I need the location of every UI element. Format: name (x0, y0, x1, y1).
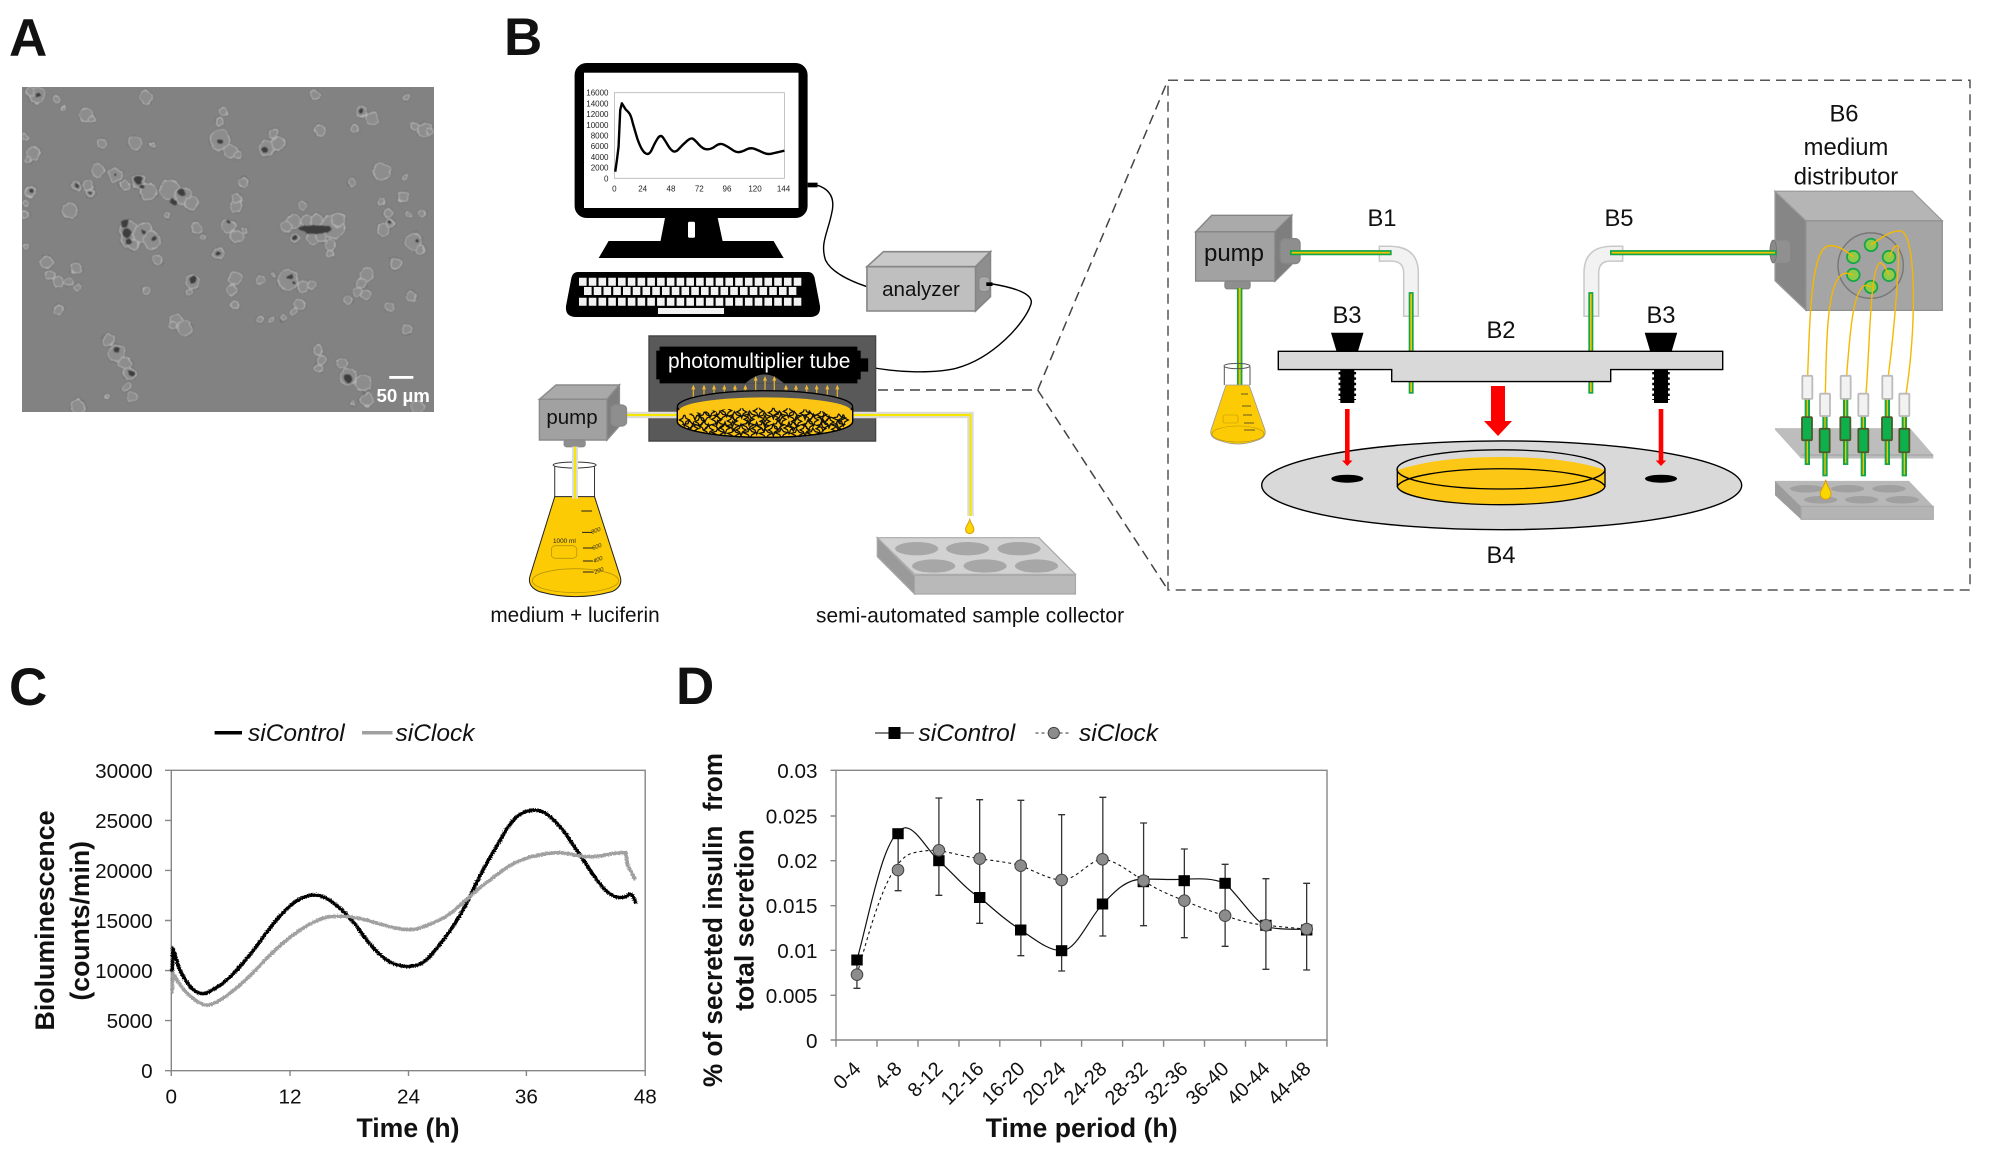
chart C: bioluminescence (30, 720, 657, 1143)
B3 screw right (1645, 333, 1677, 403)
chart D axes: 20-24 (1019, 1058, 1071, 1110)
screen chart: 16000 (586, 89, 609, 98)
labels B1 to B5 (1332, 205, 1676, 569)
chart D axis titles: % of secreted insulin from (698, 753, 728, 1087)
chart D legend: siClock (1079, 720, 1160, 747)
medium + luciferin label: medium + luciferin (490, 604, 660, 627)
screen chart: 12000 (586, 110, 609, 119)
chart D axes: 24-28 (1060, 1058, 1112, 1110)
panel label B: B (504, 8, 542, 67)
chart D axes: 36-40 (1182, 1058, 1234, 1110)
panel label A: A (9, 9, 47, 68)
screen chart: 96 (723, 184, 732, 194)
chart D axes: 4-8 (871, 1058, 907, 1094)
chart D axes: 44-48 (1264, 1058, 1316, 1110)
pump (main setup) (539, 385, 626, 447)
B6 label: distributor (1794, 164, 1898, 191)
B1 elbow connector (1290, 246, 1418, 394)
chart D axes: 0.025 (766, 806, 818, 828)
B3 holes (1331, 475, 1677, 483)
chart C axes: 0 (141, 1060, 153, 1083)
chart C axis titles: Time (h) (357, 1113, 459, 1143)
screen chart (586, 89, 791, 194)
chart D legend: siControl (918, 720, 1016, 747)
photomultiplier tube (656, 347, 868, 383)
photomultiplier tube: photomultiplier tube (668, 350, 850, 373)
chart D siClock line (857, 850, 1307, 975)
medium flask: 600 (592, 543, 604, 552)
pump (main setup): pump (546, 406, 598, 429)
chart C legend: siControl (248, 720, 345, 747)
analyzer box (867, 252, 993, 311)
medium flask: 1000 ml (553, 538, 576, 545)
medium flask (529, 447, 621, 597)
keyboard (566, 272, 820, 317)
chart D axes (766, 760, 1327, 1110)
panel label D: D (676, 657, 714, 716)
labels B1 to B5: B3 (1646, 302, 1676, 329)
B5 elbow connector (1584, 246, 1623, 394)
inset flask (1211, 363, 1265, 444)
screen chart: 14000 (586, 99, 609, 108)
screen chart: 6000 (591, 142, 609, 151)
chart C axes: 20000 (95, 860, 153, 883)
cell monolayer (678, 408, 850, 437)
inset pump (1196, 215, 1300, 289)
labels B1 to B5: B3 (1332, 302, 1362, 329)
chart C axes: 48 (634, 1085, 657, 1108)
inset pump: pump (1204, 240, 1264, 267)
culture dish with cells (677, 391, 853, 439)
analyzer box: analyzer (882, 278, 960, 301)
chart D siControl markers (851, 828, 1312, 966)
chart D axes: 0.005 (766, 985, 818, 1008)
chart D axes: 0 (806, 1030, 818, 1053)
labels B1 to B5: B5 (1604, 205, 1634, 232)
chart C axes: 24 (397, 1085, 420, 1108)
chart C axes: 12 (278, 1085, 302, 1108)
chart D axes: 0-4 (830, 1058, 866, 1094)
labels B1 to B5: B1 (1367, 205, 1397, 232)
B2 plate (1278, 351, 1723, 382)
sample collector label: semi-automated sample collector (816, 605, 1124, 628)
chart C axes (95, 760, 657, 1108)
distributor plate and outlets (1775, 376, 1933, 476)
chart C axes: 0 (166, 1085, 177, 1108)
screen chart: 48 (667, 184, 676, 194)
chart C axes: 25000 (95, 810, 153, 833)
chart D axes: 0.03 (777, 760, 818, 783)
chart C axes: 30000 (95, 760, 153, 783)
chart D axes: 28-32 (1101, 1058, 1153, 1110)
scale bar label: 50 µm (376, 385, 430, 406)
B6 label: B6 (1829, 101, 1859, 128)
medium droplet (966, 519, 974, 534)
medium flask: 400 (593, 556, 605, 565)
screen chart: 0 (604, 174, 609, 183)
medium flask: 800 (591, 527, 603, 536)
luminometer housing (649, 336, 876, 441)
tube from inset pump to flask (1237, 288, 1242, 385)
computer monitor (575, 63, 808, 258)
chart C axes: 15000 (95, 910, 153, 933)
chart D axis titles: total secretion (730, 829, 760, 1011)
B6 label (1794, 101, 1898, 191)
big red arrow (1484, 386, 1512, 436)
cable: analyzer to photomultiplier (865, 284, 1031, 372)
chart C curves (172, 810, 636, 1005)
scale bar (389, 376, 413, 379)
chart D axes: 12-16 (937, 1058, 989, 1110)
screen chart: 144 (777, 184, 791, 194)
chart C axis titles: (counts/min) (65, 841, 95, 1001)
chart D axes: 40-44 (1223, 1058, 1275, 1110)
chart D axes: 0.015 (766, 895, 818, 918)
B6 label: medium (1804, 134, 1888, 161)
chart C axis titles (30, 810, 459, 1143)
screen chart: 120 (748, 184, 762, 194)
chart D axes: 0.01 (777, 940, 818, 963)
chart D axis titles: Time period (h) (986, 1113, 1178, 1143)
chart D axes: 0.02 (777, 850, 818, 873)
chart D axis titles (698, 753, 1178, 1143)
chart D axes: 16-20 (978, 1058, 1030, 1110)
chart D axes: 32-36 (1141, 1058, 1193, 1110)
chart D legend (875, 720, 1160, 747)
screen chart: 8000 (591, 132, 609, 140)
dish on base plate (1397, 450, 1605, 505)
chart D siClock markers (851, 844, 1312, 980)
labels B1 to B5: B2 (1486, 317, 1516, 344)
B3 screw left (1331, 333, 1364, 403)
zoom lines to inset (878, 80, 1168, 590)
chart C axis titles: Bioluminescence (30, 810, 60, 1030)
chart C legend (215, 720, 476, 747)
chart C axes: 5000 (107, 1010, 153, 1033)
red arrow left (1342, 409, 1352, 466)
medium flask: 200 (593, 567, 606, 576)
screen chart: 2000 (591, 164, 609, 173)
chart D error bars (853, 797, 1310, 988)
labels B1 to B5: B4 (1486, 542, 1516, 569)
chart D siControl line (857, 828, 1307, 960)
chart C axes: 10000 (95, 960, 153, 983)
chart C axes: 36 (515, 1085, 538, 1108)
sample collector plate (877, 538, 1075, 594)
chart C legend: siClock (396, 720, 476, 747)
chart D: insulin secretion (698, 720, 1327, 1143)
cable: monitor to analyzer (808, 183, 867, 287)
screen chart: 4000 (591, 153, 609, 162)
panel A: micrograph of cells (22, 87, 434, 414)
screen chart: 10000 (586, 121, 609, 130)
chart D axes: 8-12 (904, 1058, 948, 1102)
tubing through luminometer (606, 415, 970, 516)
red arrow right (1656, 409, 1666, 466)
B6 medium distributor (1610, 101, 1942, 519)
screen chart: 0 (612, 184, 617, 194)
screen chart: 72 (695, 184, 704, 194)
inset: dashed frame (1168, 80, 1970, 590)
light arrows (691, 376, 839, 402)
screen chart: 24 (638, 184, 648, 194)
panel label C: C (9, 658, 47, 717)
B4 base plate (1262, 441, 1742, 530)
lower sample plate (1775, 480, 1933, 519)
